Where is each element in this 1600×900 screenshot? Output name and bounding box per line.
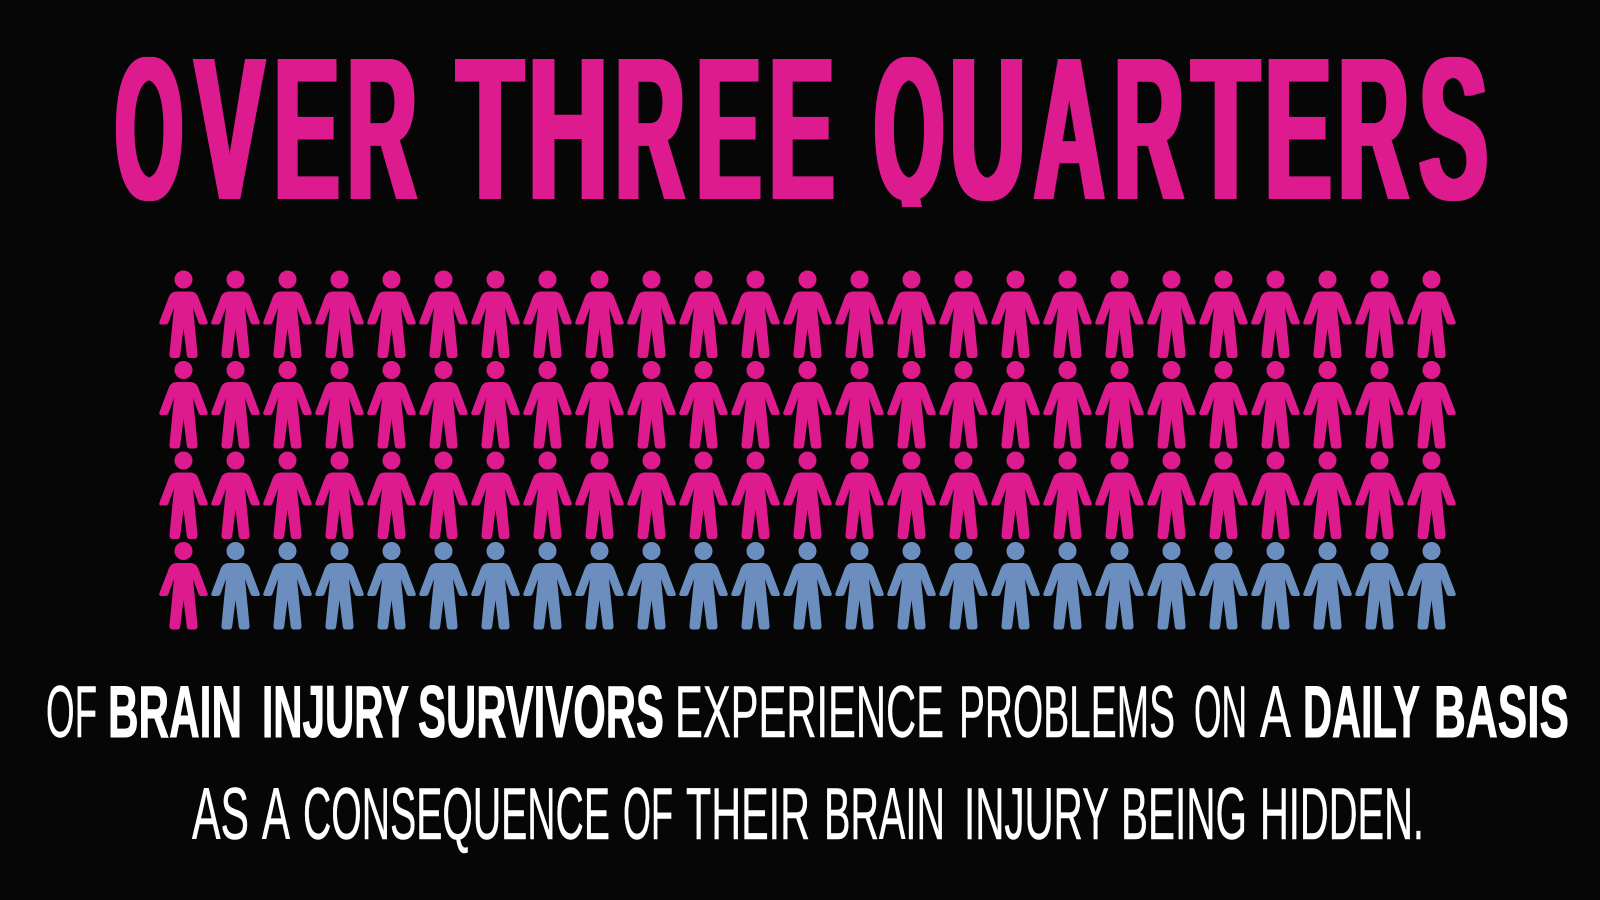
caption line 1: A [1260,672,1291,753]
title: R [615,16,685,243]
row 2 of pink people [159,361,1456,448]
caption line 1: SURVIVORS [418,672,664,753]
caption line 2: HIDDEN. [1260,774,1424,855]
title: O [115,16,183,243]
caption line 1: ON [1194,672,1247,753]
row 3 of pink people [159,452,1456,539]
caption line 1: INJURY [262,672,409,753]
title: R [347,16,417,243]
title: A [1034,16,1104,243]
title: E [274,16,339,243]
caption line 2: CONSEQUENCE [303,774,610,855]
caption line 1 [46,672,1569,753]
caption line 2: THEIR [686,774,810,855]
caption line 2 [192,774,1424,855]
title: R [1114,16,1184,243]
caption line 1: PROBLEMS [959,672,1175,753]
caption line 2: BEING [1121,774,1247,855]
title: T [457,16,523,243]
caption line 2: OF [623,774,673,855]
caption line 1: OF [46,672,97,753]
title: U [950,16,1026,243]
title: E [769,16,834,243]
caption line 2: AS [192,774,249,855]
pictogram: 100 people, 76 pink and 24 blue [159,270,1456,630]
title [116,56,1487,207]
caption line 2: INJURY [964,774,1109,855]
title: E [1265,16,1331,243]
title: R [1338,16,1409,243]
caption line 1: EXPERIENCE [675,672,944,753]
title: S [1419,16,1488,243]
row 4: one pink person then blue people [159,542,1456,630]
title: V [195,16,264,243]
caption line 2: BRAIN [824,774,945,855]
title: T [1192,16,1260,243]
title: Q [874,16,944,243]
caption line 2: A [262,774,290,855]
title: H [528,16,608,243]
caption line 1: DAILY [1303,672,1420,753]
title: E [696,16,761,243]
caption line 1: BRAIN [108,672,242,753]
row 1 of pink people [159,270,1456,358]
